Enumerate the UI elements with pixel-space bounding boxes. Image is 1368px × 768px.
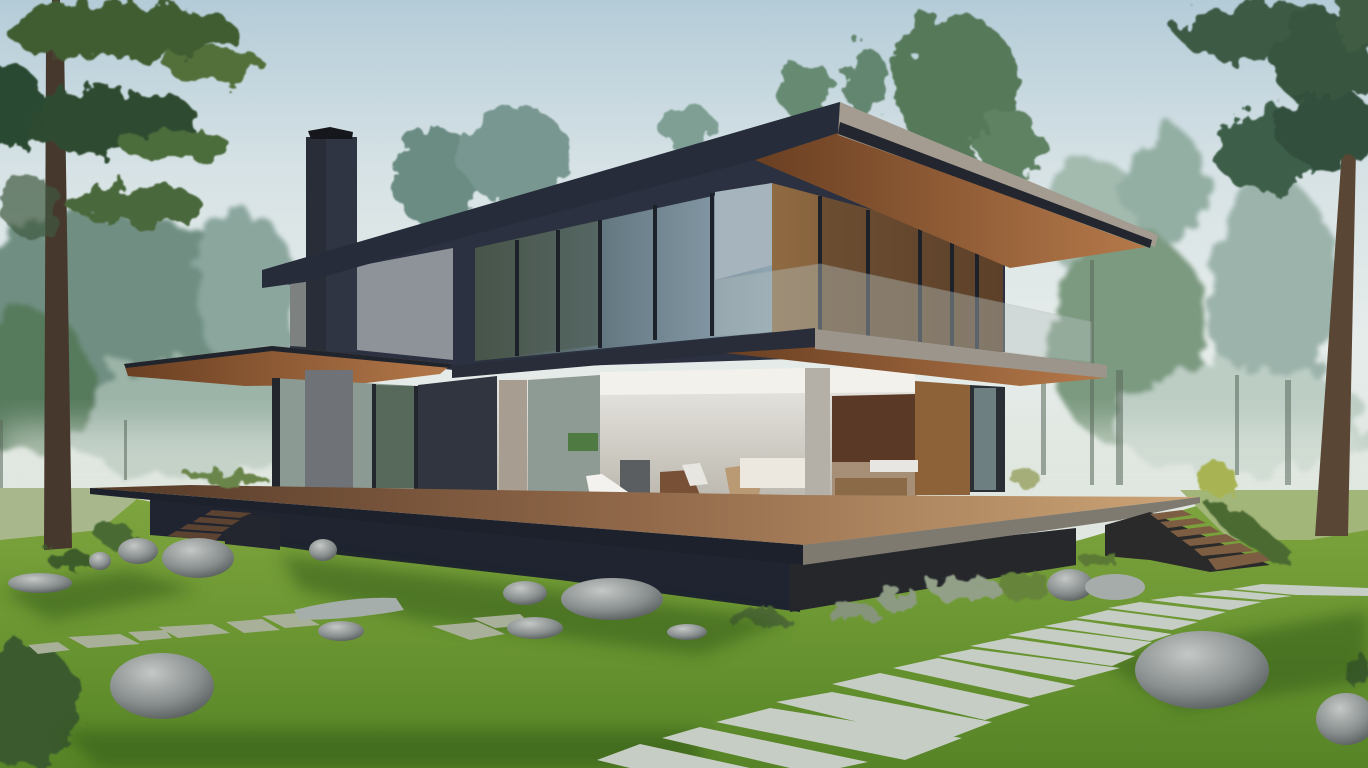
interior living room — [497, 366, 1005, 512]
stone path left — [28, 598, 532, 654]
right steps — [1105, 510, 1274, 572]
chimney — [306, 127, 357, 352]
upper glazing — [475, 183, 1003, 361]
distant misty forest — [0, 125, 1368, 480]
stone column left — [305, 370, 353, 492]
glass balustrade — [715, 264, 1091, 362]
background tree tops — [394, 13, 1042, 230]
left glazing — [272, 378, 418, 490]
grass lawn — [0, 490, 1368, 768]
left canopy — [124, 346, 452, 386]
lawn shadows — [0, 555, 1368, 768]
house — [90, 102, 1274, 612]
foundation — [150, 495, 1076, 612]
stone path right — [597, 584, 1368, 768]
background trunks — [0, 260, 1291, 490]
wooden deck — [90, 485, 1200, 565]
upper floor body — [262, 102, 1005, 370]
boulders — [8, 538, 1368, 745]
front column — [805, 368, 830, 510]
left steps — [168, 510, 280, 550]
ground floor dark wall — [418, 376, 497, 496]
grey wall panels — [290, 248, 453, 360]
mist near ground — [0, 425, 1368, 510]
right pine tree — [1177, 0, 1368, 536]
sky — [0, 0, 1368, 560]
furniture — [586, 458, 918, 512]
main roof — [262, 102, 1158, 288]
left pine tree — [0, 0, 265, 550]
far meadow — [0, 488, 1368, 540]
shrubs — [0, 463, 1368, 767]
mid floor slab — [452, 328, 1107, 386]
